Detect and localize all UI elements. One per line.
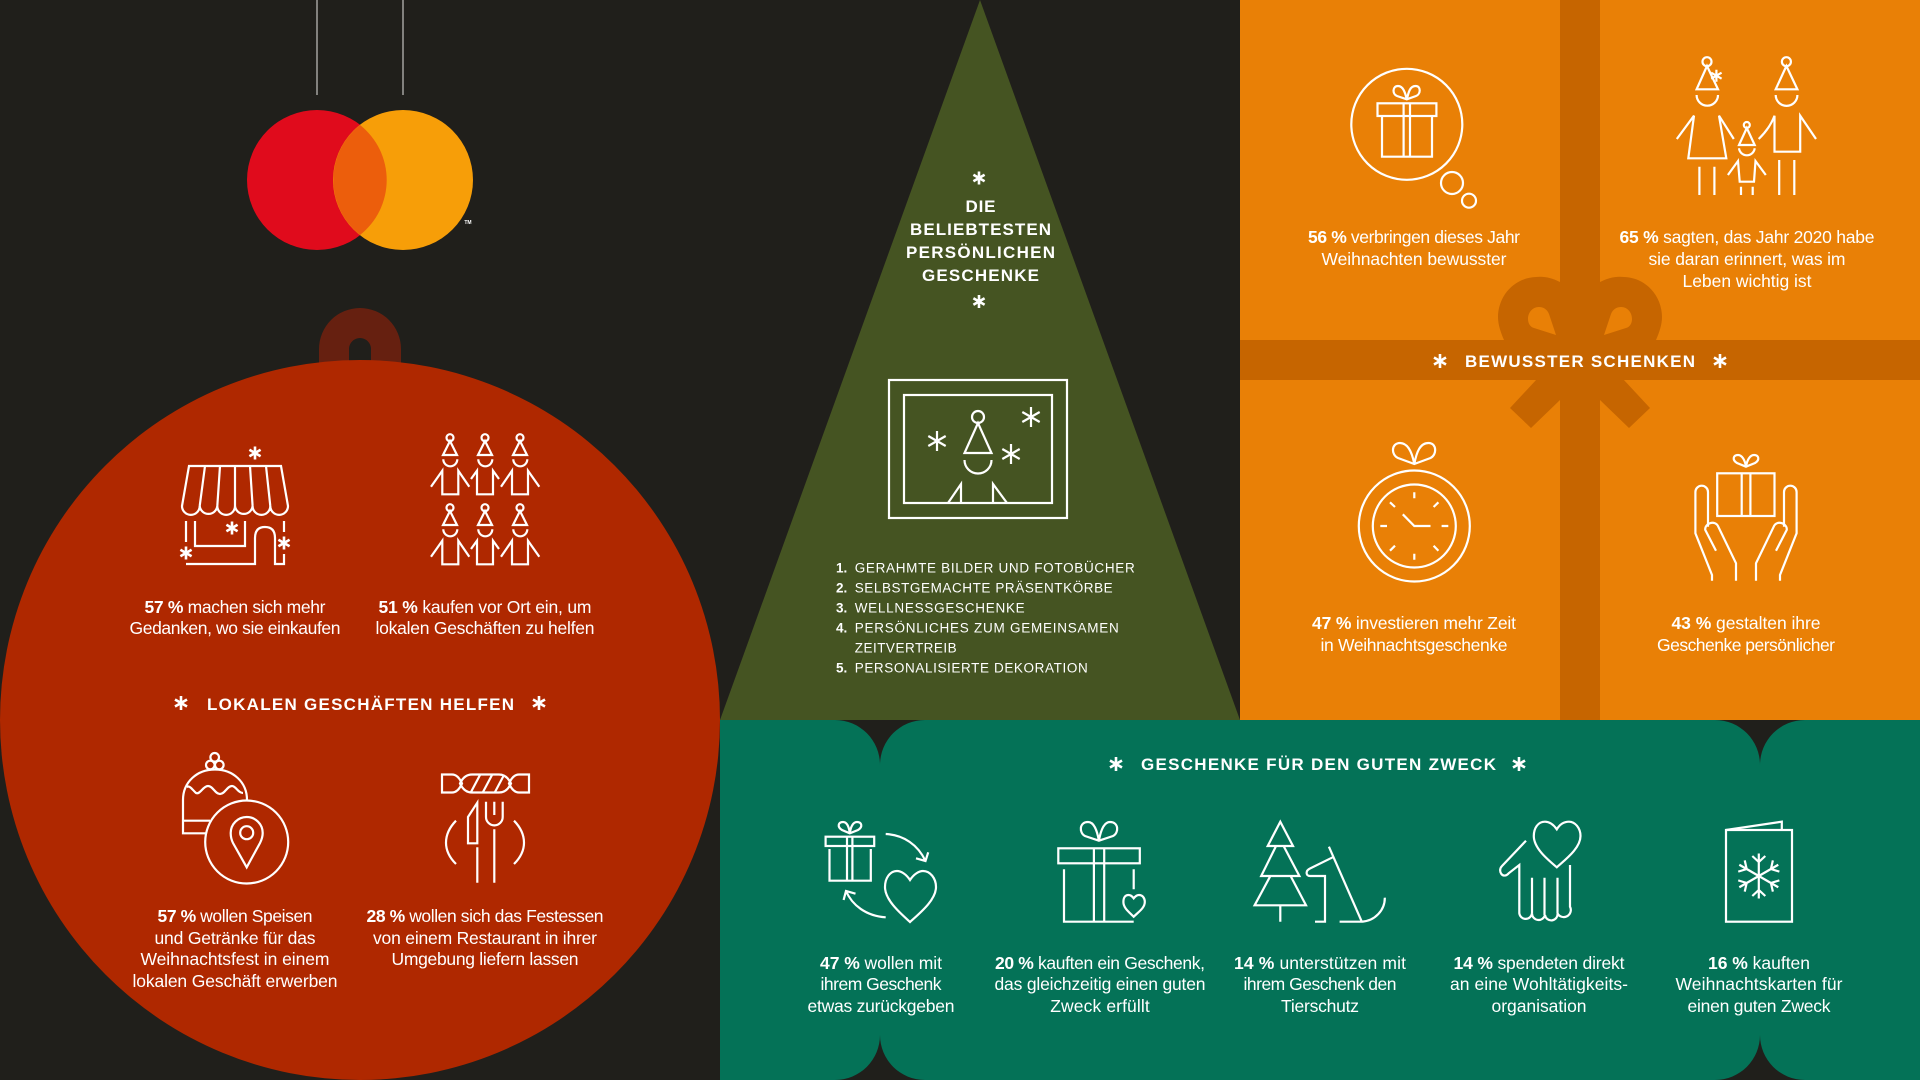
list: top five gifts: PERSONALISIERTE DEKORATION — [855, 661, 1088, 676]
text: 65 percent: sie daran erinnert, was im — [1648, 249, 1846, 269]
text: 14 percent donate: 14 % spendeten direkt — [1454, 953, 1625, 973]
text: 57 percent food — [132, 906, 338, 991]
list: top five gifts: GERAHMTE BILDER UND FOTOBÜCHER — [855, 561, 1135, 576]
list: top five gifts: PERSÖNLICHES ZUM GEMEINSAMEN — [855, 621, 1119, 636]
icon: christmas card — [1726, 822, 1792, 922]
text: 47 percent time: 47 % investieren mehr Zeit — [1312, 613, 1516, 633]
list: top five gifts: WELLNESSGESCHENKE — [855, 601, 1025, 616]
text: 57 percent food: 57 % wollen Speisen — [158, 906, 312, 926]
icon: hands with gift — [1695, 455, 1797, 581]
icon: cutlery and cracker — [442, 774, 529, 883]
text: 51 percent buying local: lokalen Geschäften zu helfen — [376, 618, 594, 638]
icon: bauble with location pin — [183, 753, 288, 884]
list: top five gifts: 3. — [836, 601, 847, 616]
text: 65 percent: 65 % sagten, das Jahr 2020 habe — [1620, 227, 1874, 247]
heading: local shops: LOKALEN GESCHÄFTEN HELFEN — [207, 695, 514, 714]
heading: favourite gifts: DIE — [966, 197, 996, 216]
ribbon and bow — [1240, 0, 1920, 720]
text: 28 percent restaurant: 28 % wollen sich das Festessen — [366, 906, 604, 926]
text: 51 percent buying local: 51 % kaufen vor Ort ein, um — [378, 597, 592, 617]
text: 20 percent: das gleichzeitig einen guten — [994, 974, 1206, 994]
panel: local shops bauble — [0, 308, 720, 1080]
text: 16 percent cards: einen guten Zweck — [1688, 996, 1831, 1016]
text: 57 percent food: und Getränke für das — [154, 928, 316, 948]
logo: two hanging baubles — [247, 0, 473, 250]
text: 43 percent: 43 % gestalten ihre — [1672, 613, 1820, 633]
icon: hand with heart — [1500, 822, 1580, 920]
heading: favourite gifts: GESCHENKE — [922, 266, 1039, 285]
panel: gifts for a good cause — [720, 720, 1920, 1080]
list: top five gifts: 1. — [836, 561, 847, 576]
panel: conscious giving gift box — [1240, 0, 1920, 720]
icon: gift and heart cycle — [826, 822, 936, 922]
text: 65 percent: Leben wichtig ist — [1682, 271, 1812, 291]
icon: tree and sled — [1255, 822, 1385, 922]
text: 16 percent cards: Weihnachtskarten für — [1676, 974, 1843, 994]
list: top five gifts: SELBSTGEMACHTE PRÄSENTKÖRBE — [855, 581, 1113, 596]
text: 47 percent time: in Weihnachtsgeschenke — [1320, 635, 1508, 655]
text: 16 percent cards — [1676, 953, 1843, 1016]
text: 47 percent time — [1312, 613, 1516, 655]
text: 14 percent animal welfare: ihrem Geschenk den — [1244, 974, 1396, 994]
text: 14 percent donate: organisation — [1492, 996, 1586, 1016]
icon: six people — [431, 434, 539, 564]
text: 43 percent: Geschenke persönlicher — [1657, 635, 1835, 655]
text: 28 percent restaurant: Umgebung liefern lassen — [392, 949, 578, 969]
text: 14 percent animal welfare: 14 % unterstützen mit — [1234, 953, 1406, 973]
icon: framed picture — [889, 380, 1067, 518]
text: 20 percent: 20 % kauften ein Geschenk, — [995, 953, 1205, 973]
text: 56 percent: Weihnachten bewusster — [1322, 249, 1507, 269]
list: top five gifts: ZEITVERTREIB — [855, 641, 957, 656]
heading: conscious giving: BEWUSSTER SCHENKEN — [1465, 352, 1695, 371]
text: 47 percent give back: ihrem Geschenk — [820, 974, 942, 994]
text: 14 percent donate — [1450, 953, 1628, 1016]
text: 47 percent give back — [808, 953, 954, 1016]
icon: family — [1677, 57, 1816, 195]
text: 51 percent buying local — [376, 597, 594, 638]
text: 14 percent animal welfare — [1234, 953, 1406, 1016]
text: 57 percent shopping — [130, 597, 340, 638]
text: 57 percent food: Weihnachtsfest in einem — [140, 949, 330, 969]
list: top five gifts: 2. — [836, 581, 847, 596]
icon: shop — [180, 446, 290, 564]
text: 57 percent shopping: 57 % machen sich mehr — [144, 597, 326, 617]
text: 16 percent cards: 16 % kauften — [1708, 953, 1810, 973]
icon: clock with bow — [1359, 443, 1470, 582]
list: top five gifts: 5. — [836, 661, 847, 676]
icon: gift thought bubble — [1351, 69, 1476, 208]
text: 56 percent: 56 % verbringen dieses Jahr — [1308, 227, 1520, 247]
text: 20 percent: Zweck erfüllt — [1050, 996, 1150, 1016]
icon: gift with heart tag — [1058, 822, 1145, 922]
text: 56 percent — [1308, 227, 1520, 269]
text: 14 percent animal welfare: Tierschutz — [1281, 996, 1359, 1016]
text: 20 percent — [994, 953, 1206, 1016]
list: top five gifts: 4. — [836, 621, 847, 636]
panel: favourite personal gifts tree — [720, 0, 1240, 720]
list: top five gifts — [836, 561, 1135, 676]
text: 43 percent — [1657, 613, 1835, 655]
text: 14 percent donate: an eine Wohltätigkeits- — [1450, 974, 1628, 994]
text: 28 percent restaurant — [366, 906, 604, 969]
text: 57 percent shopping: Gedanken, wo sie einkaufen — [130, 618, 340, 638]
logo: two hanging baubles: TM — [464, 220, 472, 226]
heading: good cause: GESCHENKE FÜR DEN GUTEN ZWECK — [1141, 755, 1497, 774]
heading: favourite gifts: BELIEBTESTEN — [910, 220, 1051, 239]
heading: favourite gifts — [906, 172, 1055, 308]
heading: favourite gifts: PERSÖNLICHEN — [906, 243, 1055, 262]
text: 47 percent give back: etwas zurückgeben — [808, 996, 954, 1016]
text: 47 percent give back: 47 % wollen mit — [820, 953, 942, 973]
text: 28 percent restaurant: von einem Restaurant in ihrer — [373, 928, 597, 948]
text: 65 percent — [1620, 227, 1874, 291]
text: 57 percent food: lokalen Geschäft erwerben — [132, 971, 338, 991]
